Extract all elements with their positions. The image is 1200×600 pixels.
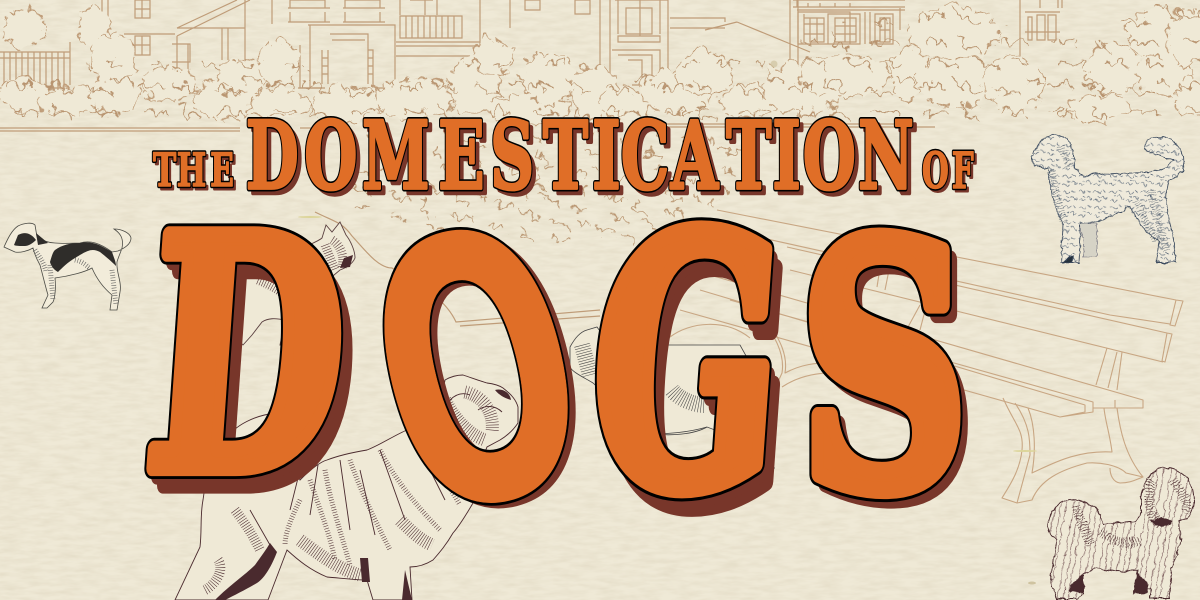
title: letter O: O xyxy=(332,144,623,600)
houses line art xyxy=(0,0,1062,95)
dog: curly doodle xyxy=(1030,134,1183,262)
title: letter S: S xyxy=(800,171,968,566)
title: DOMESTICATION: DOMESTICATION xyxy=(246,101,914,211)
paper flecks xyxy=(298,60,1037,584)
title: letter G: G xyxy=(580,162,796,567)
park bench xyxy=(657,210,1183,503)
title: THE: THE xyxy=(153,144,234,198)
title: letter G: G xyxy=(580,162,796,567)
title: OF: OF xyxy=(924,144,976,203)
title: letter G: G xyxy=(590,180,806,585)
dog: terrier xyxy=(4,223,131,310)
title: DOMESTICATION: DOMESTICATION xyxy=(250,105,918,216)
bushes and trees line art xyxy=(0,0,1200,240)
title: THE: THE xyxy=(156,147,236,201)
title: letter D: D xyxy=(136,168,357,544)
dog: shih tzu xyxy=(1047,467,1193,598)
horizon and ground lines xyxy=(0,124,935,326)
title: letter D: D xyxy=(136,168,357,544)
dog: bulldog behind G xyxy=(570,327,775,468)
title: letter D: D xyxy=(147,185,368,561)
title: DOMESTICATION: DOMESTICATION xyxy=(246,101,914,211)
title: letter S: S xyxy=(807,180,975,575)
title: letter O: O xyxy=(332,144,623,600)
title: OF: OF xyxy=(922,141,974,200)
title: OF: OF xyxy=(922,141,974,200)
title: letter S: S xyxy=(800,171,968,566)
title: letter D: D xyxy=(141,176,362,552)
title: THE: THE xyxy=(153,144,234,198)
dog: shar pei xyxy=(175,375,518,600)
title: letter G: G xyxy=(585,171,801,576)
title: letter O: O xyxy=(339,148,630,600)
dog: french bulldog behind D xyxy=(234,222,355,345)
